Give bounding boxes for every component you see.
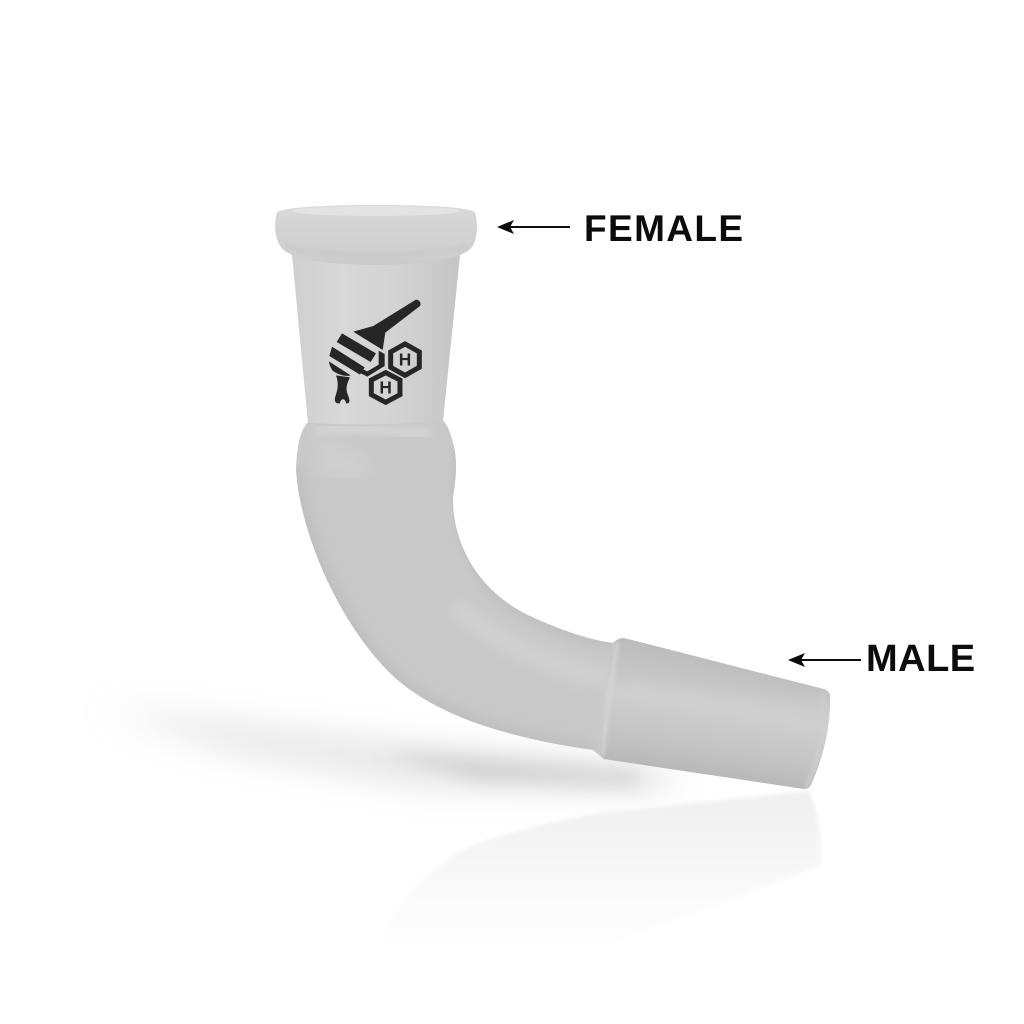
rim opening [292,206,460,216]
rim [275,205,477,265]
lower edge shading [294,470,593,752]
floor shadow [100,708,670,790]
bulge highlight [315,429,430,434]
label: male: MALE [866,638,976,680]
hexagon H lower: H [379,378,392,398]
floor reflection [375,791,822,950]
infographic canvas [168,205,974,862]
neck [292,255,460,424]
honey drip [335,375,350,403]
partial hexagon [359,351,385,377]
arrow: male [788,653,861,667]
label: female: FEMALE [584,208,745,249]
dipper stripes [329,333,376,376]
male joint [602,638,830,789]
arrow: female [497,220,570,234]
inner edge shading [457,450,615,645]
glass adapter [275,205,840,800]
curved tube [296,420,613,760]
hexagon H upper: H [399,349,411,369]
dipper handle [353,300,421,350]
logo: honey dipper and hexagons [329,300,421,403]
bend highlight [455,605,610,680]
